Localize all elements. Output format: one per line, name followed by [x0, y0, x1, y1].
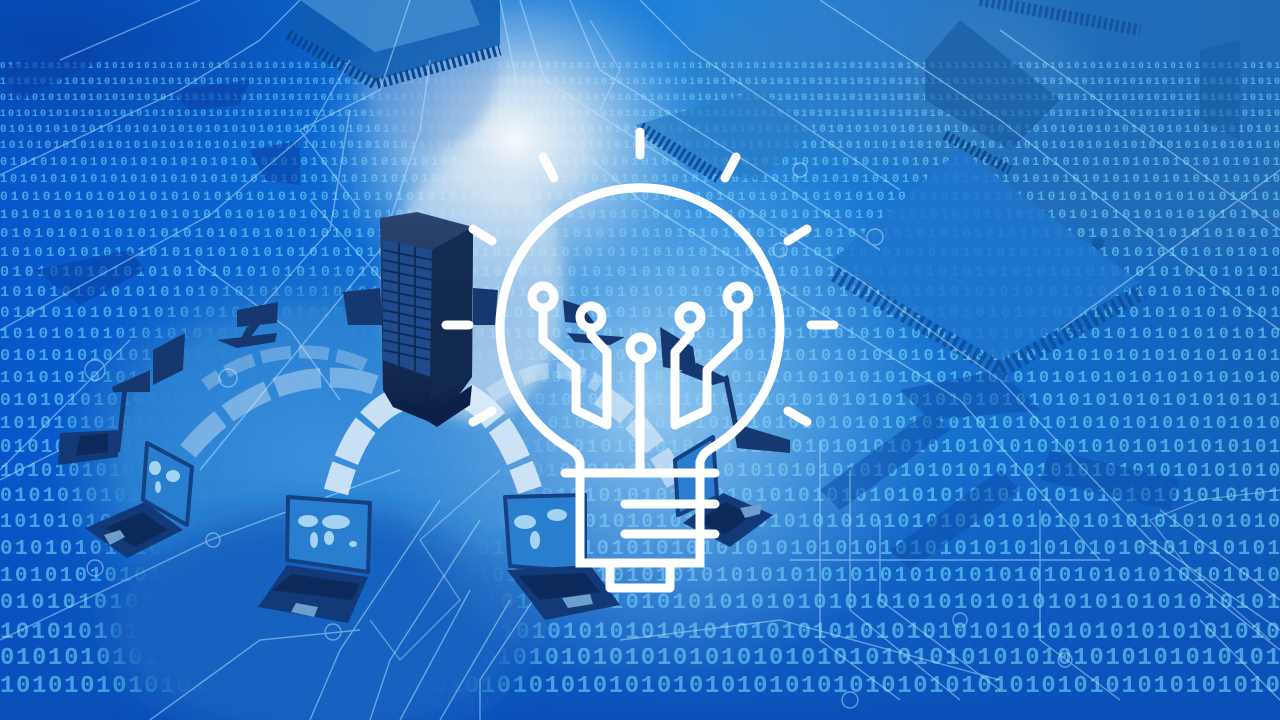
binary digit rows: 1010101010101010101010101010101010101010101010101010101010101010101010101010101010	[0, 619, 1280, 645]
binary digit rows: 10101010101010101010101010101010101010101010101010101010101010101010101010101010101010	[0, 565, 1280, 588]
binary digit rows: 0101010101010101010101010101010101010101010101010101010101010101010101010101010101010101010101010101	[0, 347, 1280, 366]
paper data ribbons	[185, 352, 680, 492]
laptop: right of centre	[505, 495, 620, 620]
binary digit rows: 010101010101010101010101010101010101010101010101010101010101010101010101010101010101010101	[0, 485, 1280, 508]
laptop: rear left	[217, 302, 278, 348]
binary digit rows: 010101010101010101010101010101010101010101010101010101010101010101010101010101010101010101010101010101010101010101010101010101010101010101010101	[0, 124, 1280, 136]
binary digit rows: 0101010101010101010101010101010101010101010101010101010101010101010101010101010101010101010101010101010101010101	[0, 226, 1280, 242]
binary digit rows: 101010101010101010101010101010101010101010101010101010101010101010101010101010101010101010101010101010101010101010101010	[0, 207, 1280, 222]
laptop: behind bulb right rear	[660, 327, 730, 385]
binary digit rows: 010101010101010101010101010101010101010101010101010101010101010101010101010101010101010101010101010101010101010101010101	[0, 189, 1280, 204]
ribbon: to far left laptop	[205, 352, 365, 385]
icon: light bulb with circuit filaments	[446, 132, 834, 588]
laptop: lower right	[675, 437, 773, 547]
chip: upper right	[925, 0, 1240, 170]
binary digit rows: 01010101010101010101010101010101010101010101010101010101010101010101010101010101	[0, 645, 1280, 672]
ribbon: to right laptop	[465, 395, 530, 490]
binary digit rows: 1010101010101010101010101010101010101010101010101010101010101010101010101010101010101010101010	[0, 460, 1280, 482]
binary digit rows: 0101010101010101010101010101010101010101010101010101010101010101010101010101010101010101010101	[0, 436, 1280, 458]
binary digit rows: 01010101010101010101010101010101010101010101010101010101010101010101010101010101010101	[0, 538, 1280, 561]
soft light pools	[50, 0, 940, 720]
ribbon: behind bulb	[600, 395, 680, 490]
laptop: left	[85, 443, 192, 558]
dark right bars	[820, 370, 1180, 570]
binary digit rows: 10101010101010101010101010101010101010101010101010101010101010101010101010101010	[0, 673, 1280, 700]
chip: centre	[635, 90, 815, 180]
binary digit rows: 0101010101010101010101010101010101010101010101010101010101010101010101010101010101	[0, 590, 1280, 615]
ribbon: to left laptop	[185, 378, 375, 455]
dark left patches	[0, 40, 300, 305]
filaments	[532, 286, 749, 473]
binary digit rows: 1010101010101010101010101010101010101010101010101010101010101010101010101010101010101010101010101010101010101010	[0, 245, 1280, 261]
binary digit rows: 10101010101010101010101010101010101010101010101010101010101010101010101010101010101010101010101010101010101010101010101010101010	[0, 172, 1280, 186]
binary digit rows: 101010101010101010101010101010101010101010101010101010101010101010101010101010101010101010101010	[0, 414, 1280, 434]
laptop: centre	[258, 497, 370, 623]
binary digit rows: 1010101010101010101010101010101010101010101010101010101010101010101010101010101010101010101010101010	[0, 325, 1280, 343]
map outlines	[370, 20, 1280, 660]
chip: large right	[830, 150, 1142, 370]
binary digit rows: 0101010101010101010101010101010101010101010101010101010101010101010101010101010101010101010101010101	[0, 304, 1280, 322]
binary digit rows: 01010101010101010101010101010101010101010101010101010101010101010101010101010101010101010101010101010101010101010101010101010101	[0, 155, 1280, 169]
rays	[446, 132, 834, 422]
laptops	[58, 300, 790, 623]
binary digit rows: 1010101010101010101010101010101010101010101010101010101010101010101010101010101010101010101010101010101010101010101010101010101010101010101010101010101010101010	[0, 109, 1280, 120]
binary digit rows: 101010101010101010101010101010101010101010101010101010101010101010101010101010101010101010	[0, 511, 1280, 534]
bulb base lines	[565, 473, 715, 588]
laptop: behind bulb left	[563, 300, 625, 345]
binary digit rows: 1010101010101010101010101010101010101010101010101010101010101010101010101010101010101010101010101010	[0, 369, 1280, 388]
binary digit rows: 0101010101010101010101010101010101010101010101010101010101010101010101010101010101010101010101010101010101010101010101010101010101010101010101010101010101010101	[0, 61, 1280, 71]
binary digit rows: 101010101010101010101010101010101010101010101010101010101010101010101010101010101010101010101010101010101010101010101010101010101010101010101010	[0, 140, 1280, 152]
bulb outline	[500, 188, 780, 563]
laptop: far left	[58, 333, 185, 465]
microchips	[0, 0, 1240, 570]
ribbon: to centre laptop	[336, 398, 402, 492]
binary digit rows: 01010101010101010101010101010101010101010101010101010101010101010101010101010101010101010101010101010101	[0, 264, 1280, 281]
server tower	[343, 212, 498, 427]
laptop: behind bulb right	[723, 375, 790, 453]
binary digit rows: 1010101010101010101010101010101010101010101010101010101010101010101010101010101010101010101010101010101010101010101010101010101010101010101010101010101010101010	[0, 77, 1280, 88]
binary digit rows: 10101010101010101010101010101010101010101010101010101010101010101010101010101010101010101010101010101010	[0, 284, 1280, 301]
chip: top centre-left	[285, 0, 500, 84]
binary digit rows: 010101010101010101010101010101010101010101010101010101010101010101010101010101010101010101010101	[0, 391, 1280, 411]
binary digit rows: 0101010101010101010101010101010101010101010101010101010101010101010101010101010101010101010101010101010101010101010101010101010101010101010101010101010101010101	[0, 93, 1280, 104]
